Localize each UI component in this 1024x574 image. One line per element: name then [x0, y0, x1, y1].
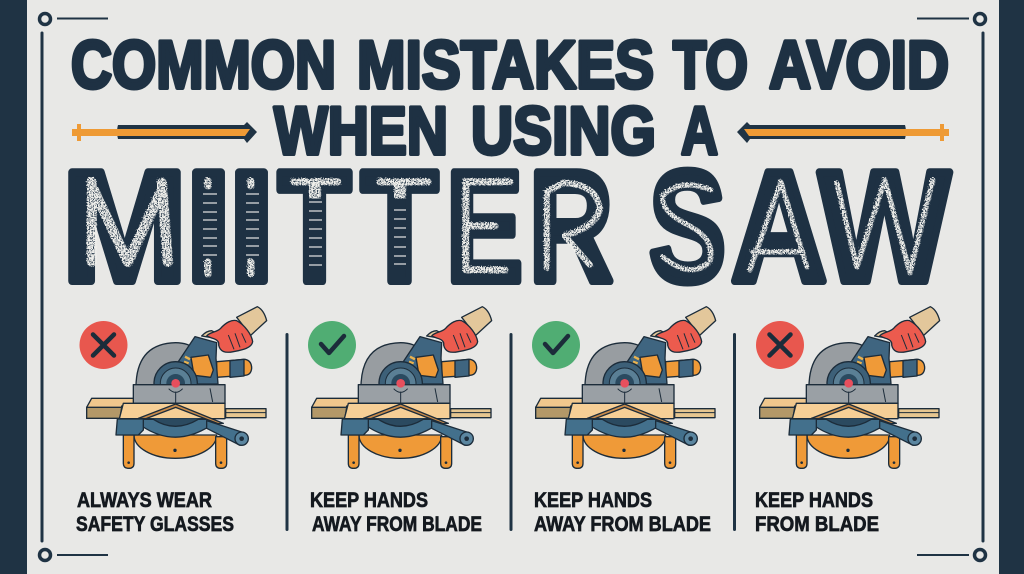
label: ALWAYS WEAR: [77, 489, 212, 512]
label: KEEP HANDS: [755, 489, 873, 512]
distressed texture on miter saw letters: [92, 180, 933, 274]
title line 3: miter saw: I: [185, 139, 232, 315]
right arrow: [737, 122, 949, 143]
divider 2: [510, 333, 512, 531]
title line 3: miter saw: [62, 139, 950, 315]
title line 3: miter saw: W: [819, 139, 950, 315]
illustration: miter saw: [536, 307, 716, 468]
title line 3: miter saw: M: [62, 139, 187, 315]
title line 1: COMMON: [71, 27, 336, 103]
panel 4: keep hands from blade: [755, 307, 940, 536]
label: KEEP HANDS: [534, 489, 652, 512]
title line 3: miter saw: T: [361, 139, 438, 315]
right side bar: [999, 0, 1024, 574]
icon: green check: [308, 321, 356, 369]
panel 3: keep hands away from blade: [532, 307, 716, 536]
title line 1: MISTAKES: [357, 27, 654, 103]
left arrow: [72, 122, 257, 143]
panel 2: keep hands away from blade: [308, 307, 492, 536]
title line 2: USING: [471, 93, 656, 169]
title line 3: miter saw: R: [529, 139, 613, 315]
left side bar: [0, 0, 27, 574]
title line 1: AVOID: [769, 27, 949, 103]
title line 1: TO: [673, 27, 748, 103]
title line 3: miter saw: E: [446, 139, 523, 315]
title line 2: [274, 93, 718, 169]
panel 1: always wear safety glasses: [76, 307, 267, 536]
title line 3: miter saw: S: [649, 139, 726, 315]
label: SAFETY GLASSES: [76, 513, 234, 536]
icon: green check: [532, 321, 580, 369]
label: FROM BLADE: [755, 513, 879, 536]
illustration: miter saw: [312, 307, 492, 468]
title line 1: [71, 27, 949, 103]
illustration: miter saw: [87, 307, 267, 468]
title line 2: A: [681, 93, 718, 169]
label: KEEP HANDS: [310, 489, 428, 512]
title line 3: miter saw: I: [228, 139, 275, 315]
divider 1: [286, 333, 288, 531]
divider 3: [733, 333, 736, 531]
title line 3: miter saw: A: [731, 139, 827, 315]
label: AWAY FROM BLADE: [534, 513, 711, 536]
label: AWAY FROM BLADE: [312, 513, 482, 536]
title line 2: WHEN: [274, 93, 448, 169]
icon: red cross: [756, 321, 804, 369]
title line 3: miter saw: T: [278, 139, 351, 315]
icon: red cross: [80, 321, 128, 369]
illustration: miter saw: [760, 307, 940, 468]
